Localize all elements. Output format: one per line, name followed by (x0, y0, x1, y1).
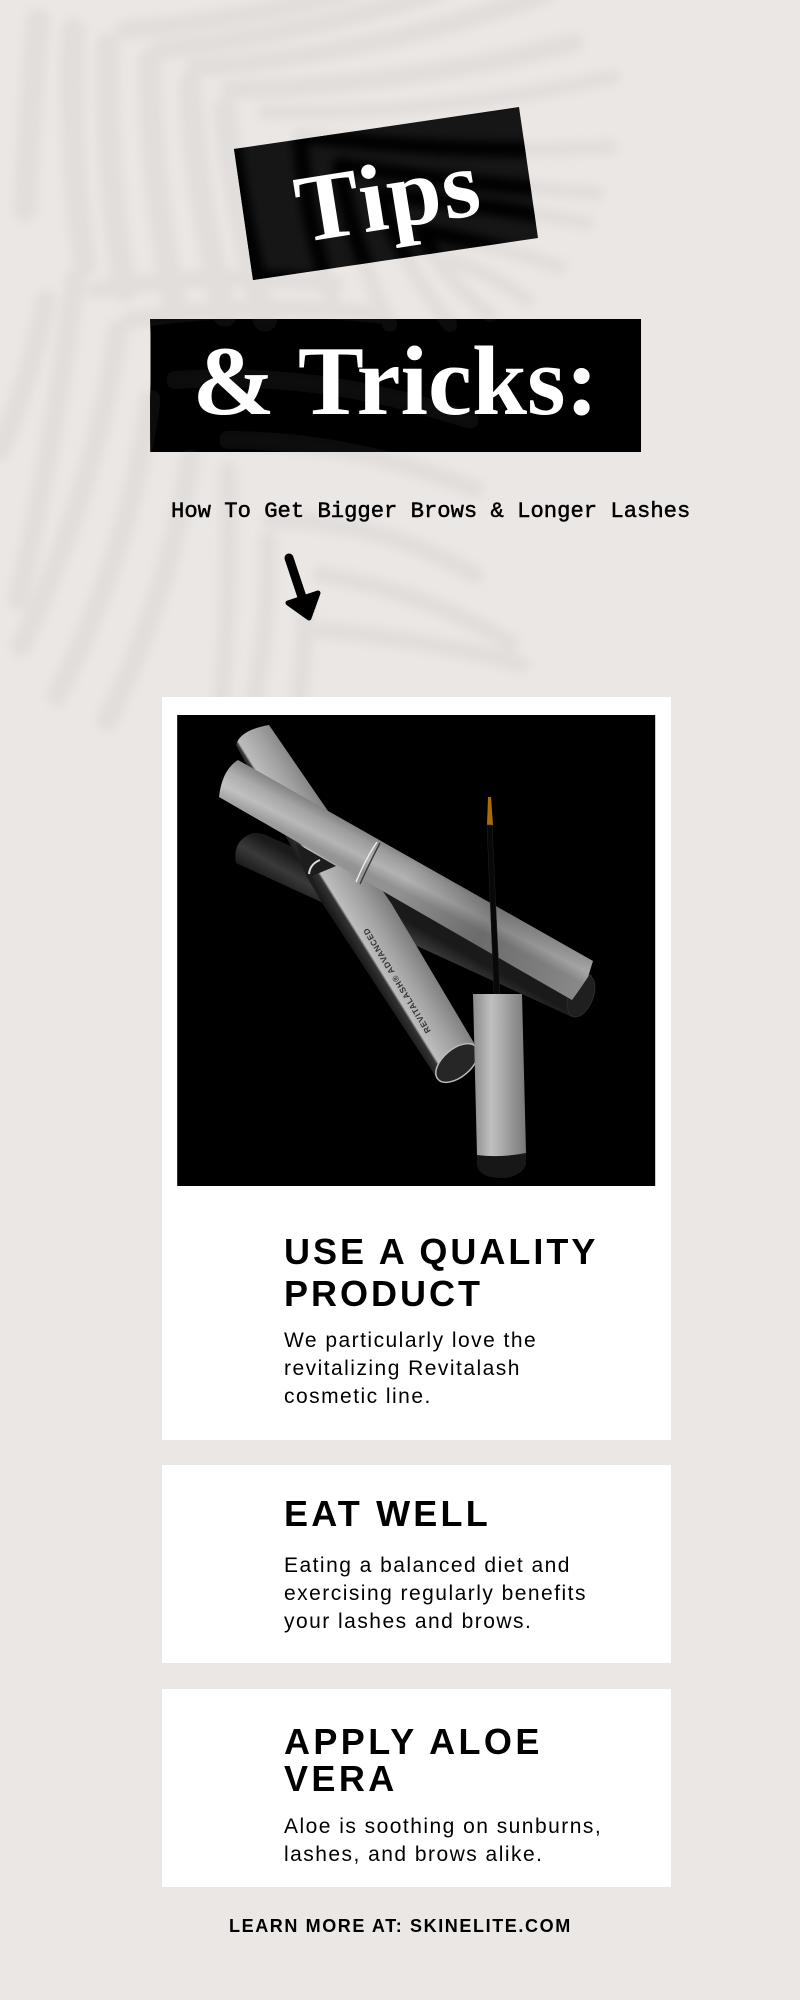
title block: & Tricks:: & Tricks: (192, 327, 599, 436)
body: eat well: Eating a balanced diet and (284, 1554, 571, 1577)
open applicator wand (473, 797, 526, 1178)
arrow pointing down (284, 554, 320, 620)
angled tube with label: REVITALASH® ADVANCED (361, 926, 433, 1035)
body: apply aloe vera: lashes, and brows alike. (284, 1843, 543, 1866)
title block: Tips (234, 107, 538, 280)
heading: apply aloe vera (284, 1721, 543, 1799)
body: use a quality product (284, 1329, 537, 1408)
angled tube with label (236, 725, 485, 1090)
body: eat well: your lashes and brows. (284, 1610, 532, 1633)
panel: apply aloe vera (162, 1689, 671, 1887)
body: use a quality product: We particularly love the (284, 1329, 537, 1352)
title block: Tips: Tips (288, 129, 488, 263)
product image: Revitalash tubes (177, 715, 656, 1186)
body: eat well: exercising regularly benefits (284, 1582, 587, 1605)
heading: use a quality product: USE A QUALITY (284, 1231, 598, 1272)
panel: use a quality product (162, 697, 671, 1440)
heading: apply aloe vera: APPLY ALOE (284, 1721, 543, 1762)
body: apply aloe vera: Aloe is soothing on sunburns, (284, 1815, 602, 1838)
heading: apply aloe vera: VERA (284, 1758, 398, 1799)
title block: & Tricks: (150, 319, 641, 452)
body: eat well (284, 1554, 587, 1633)
footer call to action: LEARN MORE AT: SKINELITE.COM (229, 1916, 572, 1936)
subtitle: How To Get Bigger Brows & Longer Lashes (171, 499, 690, 524)
body: use a quality product: cosmetic line. (284, 1385, 432, 1408)
main silver tube (219, 760, 593, 1000)
heading: use a quality product (284, 1231, 598, 1314)
dark tube behind (235, 833, 600, 1021)
body: apply aloe vera (284, 1815, 602, 1866)
heading: eat well: EAT WELL (284, 1493, 491, 1534)
panel: eat well (162, 1464, 671, 1662)
body: use a quality product: revitalizing Revitalash (284, 1357, 521, 1380)
heading: use a quality product: PRODUCT (284, 1273, 483, 1314)
